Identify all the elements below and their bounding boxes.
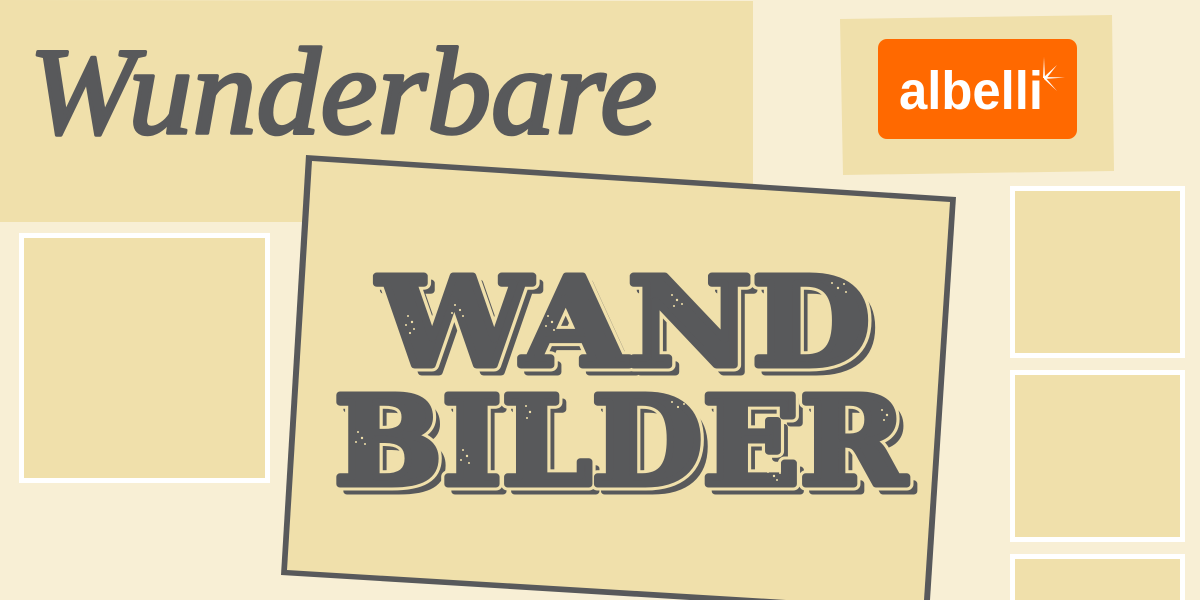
letterpress speckle texture bbox=[355, 282, 888, 481]
photo frame: right top bbox=[1012, 188, 1182, 356]
logo: albelli bbox=[878, 39, 1077, 139]
photo frame: right bottom bbox=[1010, 554, 1185, 600]
logo: albelli: albelli bbox=[899, 61, 1043, 121]
icon: sparkle bbox=[1043, 57, 1065, 91]
heading: WAND: WAND bbox=[376, 250, 870, 394]
photo frame: left bbox=[22, 236, 268, 480]
heading shadow: BILDER: BILDER bbox=[341, 376, 915, 520]
title: Wunderbare: Wunderbare bbox=[29, 23, 657, 160]
photo frame: right middle bbox=[1012, 372, 1182, 540]
panel: tilted poster bbox=[281, 155, 956, 600]
heading: BILDER: BILDER bbox=[334, 369, 908, 513]
panel: logo background bbox=[840, 15, 1114, 175]
panel: title background bbox=[0, 0, 753, 222]
heading outline: WAND: WAND bbox=[376, 250, 870, 394]
heading shadow: WAND: WAND bbox=[383, 257, 877, 401]
heading outline: BILDER: BILDER bbox=[334, 369, 908, 513]
heading: WAND BILDER bbox=[334, 250, 915, 520]
